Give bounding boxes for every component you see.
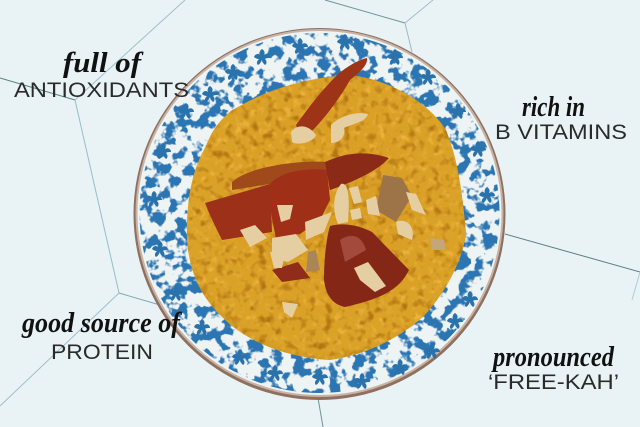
risotto [187,75,466,360]
label: good source of protein [21,307,183,364]
label: pronounced free-kah [488,341,619,394]
label: good source of protein: PROTEIN [51,341,153,364]
label: full of antioxidants: ANTIOXIDANTS [14,79,189,102]
label: good source of protein: good source of [21,307,183,339]
label: rich in B vitamins: B VITAMINS [495,121,627,144]
label: pronounced free-kah: pronounced [490,341,614,373]
label: pronounced free-kah: ‘FREE-KAH’ [488,371,619,394]
plate blue floral pattern [146,34,495,389]
label: full of antioxidants: full of [63,47,145,79]
label: rich in B vitamins: rich in [522,91,585,123]
walnuts [240,113,446,318]
plate [134,28,506,400]
label: full of antioxidants [14,47,189,102]
label: rich in B vitamins [495,91,627,144]
cured ham pieces [205,58,409,307]
